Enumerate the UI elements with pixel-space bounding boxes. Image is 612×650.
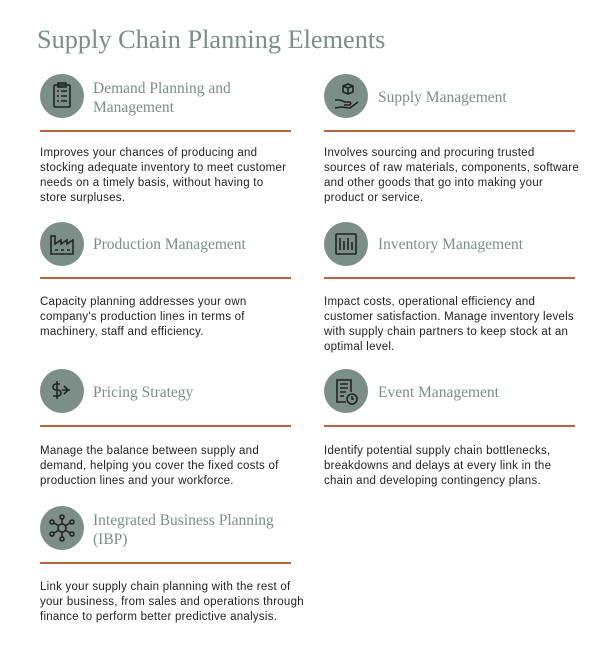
text: supply: Involves sourcing and procuring trusted: [324, 147, 534, 159]
text: inventory: customer satisfaction. Manage inventory levels: [324, 311, 574, 323]
text: production: machinery, staff and efficiency.: [40, 326, 204, 338]
text: event: breakdowns and delays at every link in the: [324, 460, 551, 472]
heading: demand: [93, 80, 231, 116]
icon: event: [324, 369, 368, 413]
text: inventory: [324, 296, 574, 353]
icon: pricing: [40, 369, 84, 413]
icon: clipboard: [40, 74, 84, 118]
text: demand: [40, 147, 286, 204]
heading: IBP: Integrated Business Planning: [93, 512, 274, 529]
text: IBP: your business, from sales and operations through: [40, 596, 304, 608]
icon: inventory: [324, 222, 368, 266]
text: inventory: optimal level.: [324, 341, 395, 353]
text: demand: store surpluses.: [40, 192, 125, 204]
text: pricing: Manage the balance between supply and: [40, 445, 259, 457]
heading: inventory: Inventory Management: [378, 236, 523, 253]
heading: event: Event Management: [378, 384, 499, 401]
text: pricing: production lines and your workforce.: [40, 475, 234, 487]
heading: demand: Management: [93, 99, 174, 116]
text: inventory: Impact costs, operational efficiency and: [324, 296, 535, 308]
text: production: company's production lines in terms of: [40, 311, 245, 323]
heading: pricing: Pricing Strategy: [93, 384, 193, 401]
text: demand: Improves your chances of producing and: [40, 147, 257, 159]
icon: factory: [40, 222, 84, 266]
text: event: Identify potential supply chain bottlenecks,: [324, 445, 550, 457]
heading: supply: Supply Management: [378, 89, 507, 106]
text: supply: sources of raw materials, components, software: [324, 162, 579, 174]
heading: demand: Demand Planning and: [93, 80, 231, 97]
text: IBP: Link your supply chain planning with the rest of: [40, 581, 290, 593]
text: supply: [324, 147, 579, 204]
text: pricing: [40, 445, 279, 487]
icon: hand box: [324, 74, 368, 118]
heading: IBP: [93, 512, 274, 548]
text: supply: and other goods that go into making your: [324, 177, 543, 189]
heading: production: Production Management: [93, 236, 246, 253]
text: demand: stocking adequate inventory to meet customer: [40, 162, 286, 174]
heading: IBP: (IBP): [93, 531, 127, 548]
text: inventory: with supply chain partners to keep stock at an: [324, 326, 568, 338]
text: IBP: finance to perform better predictive analysis.: [40, 611, 277, 623]
text: demand: needs on a timely basis, without having to: [40, 177, 263, 189]
title: Supply Chain Planning Elements: [37, 25, 385, 54]
icon: network: [40, 506, 84, 550]
text: pricing: demand, helping you cover the fixed costs of: [40, 460, 279, 472]
text: production: [40, 296, 247, 338]
text: event: chain and developing contingency plans.: [324, 475, 541, 487]
text: IBP: [40, 581, 304, 623]
text: supply: product or service.: [324, 192, 423, 204]
text: production: Capacity planning addresses your own: [40, 296, 247, 308]
text: event: [324, 445, 551, 487]
